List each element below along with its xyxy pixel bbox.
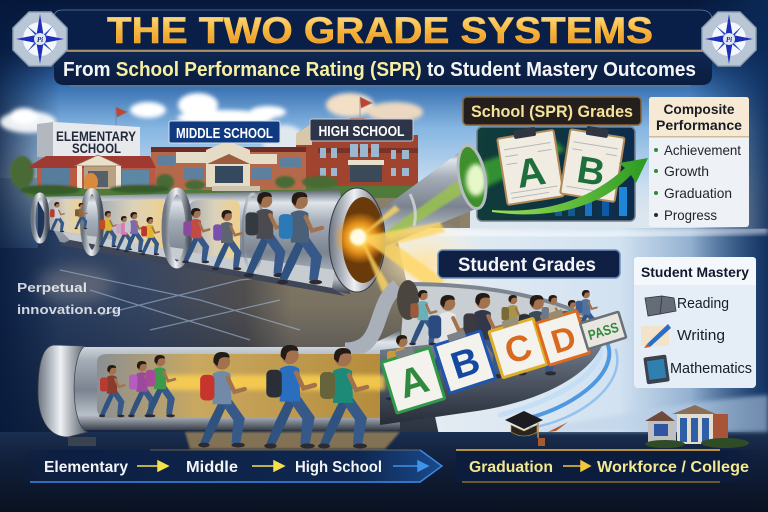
icon: book	[645, 296, 676, 316]
clouds	[0, 93, 423, 165]
watermark: innovation.org	[17, 302, 121, 317]
logo left	[13, 12, 67, 66]
right timeline bar: Graduation	[469, 459, 553, 476]
bullet list: Achievement	[664, 142, 741, 158]
high school sign	[310, 119, 413, 141]
outer pipe body	[36, 190, 350, 294]
foot bracket	[68, 437, 96, 446]
pipe interior glow	[97, 354, 380, 418]
back wall with seated students	[400, 284, 600, 350]
card C: C	[500, 325, 537, 372]
right timeline bar: Workforce / College	[597, 459, 749, 476]
SPR grades heading: School (SPR) Grades	[471, 102, 633, 121]
composite performance heading: Composite	[664, 101, 735, 117]
clipboard B: B	[574, 149, 608, 195]
high school	[296, 118, 418, 186]
clipboard A: A	[513, 149, 549, 197]
high school sign: HIGH SCHOOL	[318, 124, 405, 140]
logo right	[702, 12, 756, 66]
pipe windows	[48, 199, 240, 260]
back wall rail	[405, 284, 596, 320]
subtitle: From School Performance Rating (SPR) to Student Mastery Outcomes	[63, 59, 696, 81]
icon: tablet	[643, 354, 670, 384]
reading label: Reading	[677, 295, 729, 312]
middle school sign	[169, 121, 280, 143]
card C	[487, 313, 547, 378]
bushes	[20, 185, 170, 195]
SPR grades heading	[463, 97, 641, 125]
icon: pen	[641, 324, 671, 348]
middle school	[151, 141, 306, 191]
writing label: Writing	[677, 327, 725, 344]
SPR grades panel	[454, 123, 648, 221]
bullet list: Growth	[664, 163, 709, 179]
arrow	[137, 461, 168, 471]
clipboard A	[496, 124, 564, 205]
walkway	[62, 232, 335, 288]
composite performance panel	[649, 97, 749, 227]
buildings: elementary, middle and high school	[10, 97, 420, 198]
college building	[645, 405, 749, 448]
elementary sign text: ELEMENTARY	[56, 128, 137, 144]
left timeline bar: Middle	[186, 459, 238, 476]
arrow	[393, 461, 428, 471]
end flange	[38, 345, 88, 437]
upper pipe students	[50, 192, 322, 284]
card PASS	[580, 312, 626, 349]
right timeline bar	[456, 450, 768, 482]
golden light wash behind outlet	[363, 220, 487, 304]
pipe main body	[55, 330, 400, 430]
card D	[535, 305, 590, 365]
left timeline bar	[20, 450, 442, 483]
student grades heading: Student Grades	[458, 255, 596, 276]
green energy streaks	[474, 138, 565, 190]
card PASS: PASS	[586, 319, 620, 343]
card B	[433, 325, 496, 393]
seated students behind grade cards	[386, 290, 597, 400]
walking students foreground	[198, 345, 367, 449]
upper pipe with walking students	[33, 190, 350, 296]
watermark: Perpetual	[17, 280, 87, 295]
bullet list: Graduation	[664, 185, 732, 201]
student mastery heading: Student Mastery	[641, 264, 749, 280]
interior students	[99, 355, 175, 417]
card D: D	[547, 318, 580, 361]
card A	[380, 342, 445, 413]
lit floor below pipe	[185, 432, 400, 449]
blue motion swoosh	[500, 345, 617, 428]
flag	[360, 97, 372, 117]
title: THE TWO GRADE SYSTEMS	[107, 10, 653, 51]
clipboard B	[560, 123, 626, 202]
middle school sign: MIDDLE SCHOOL	[176, 126, 273, 142]
arrow: growth	[492, 158, 648, 214]
student mastery panel	[634, 257, 756, 388]
left timeline bar: Elementary	[44, 459, 128, 476]
flange rings	[33, 191, 263, 270]
header banner	[54, 10, 712, 86]
graduation cap icon	[505, 411, 568, 446]
arrow	[563, 461, 590, 471]
student grades heading	[438, 250, 620, 278]
flag	[116, 107, 127, 125]
mathematics label: Mathematics	[670, 360, 752, 377]
elementary school	[26, 122, 156, 191]
right pipe run under cards	[380, 325, 605, 425]
arrow	[252, 461, 284, 471]
curl from upper flange	[345, 286, 398, 350]
elementary sign text: SCHOOL	[72, 140, 121, 156]
big flange with golden glow	[329, 188, 445, 292]
composite performance heading: Performance	[656, 117, 742, 133]
lawn	[18, 186, 420, 198]
card A: A	[393, 357, 434, 407]
card B: B	[446, 340, 485, 388]
curl opening	[397, 280, 419, 320]
trees	[10, 156, 338, 190]
green outlet pipe to SPR panel	[378, 148, 478, 246]
bar chart	[555, 187, 627, 216]
grade cards	[380, 305, 626, 413]
bullet list: Progress	[664, 207, 717, 223]
left timeline bar: High School	[295, 459, 382, 476]
lower curved pipe	[38, 280, 605, 449]
pipe mouth	[454, 143, 491, 211]
bullet list	[654, 142, 741, 223]
